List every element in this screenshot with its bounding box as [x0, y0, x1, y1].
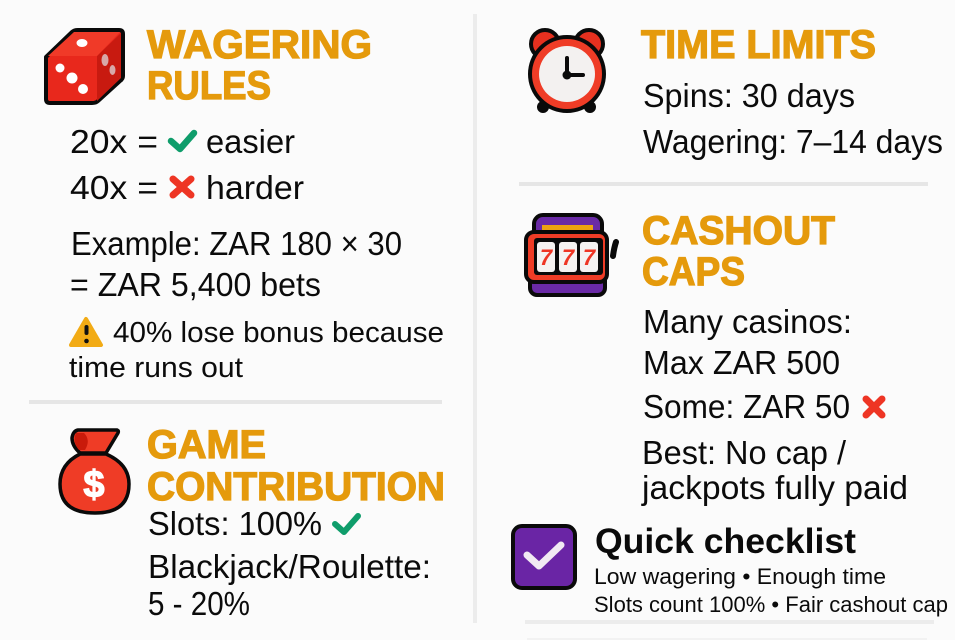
- icon: alarm clock: [530, 30, 604, 113]
- heading: wagering rules: [147, 23, 372, 108]
- icon: money bag: [60, 430, 129, 513]
- icon: slot machine: 7: [540, 245, 554, 270]
- heading: game contribution: CONTRIBUTION: [147, 465, 445, 509]
- text: many casinos: Many casinos:: [643, 303, 852, 340]
- text: blackjack roulette: [148, 548, 431, 622]
- text: time limit values: [643, 77, 943, 160]
- text: blackjack roulette: 5 - 20%: [148, 585, 250, 622]
- text: some casinos: Some: ZAR 50: [643, 388, 850, 425]
- icon: warning triangle: [71, 319, 101, 345]
- text: checklist items: Low wagering • Enough time: [594, 564, 886, 589]
- text: example: [70, 225, 402, 303]
- panel: wagering rules: [46, 23, 444, 384]
- text: best: jackpots fully paid: [641, 469, 908, 506]
- panel: quick checklist: [513, 522, 948, 617]
- heading: cashout caps: [642, 209, 835, 294]
- text: 20x easier: 20x =: [70, 123, 158, 160]
- text: slots: Slots: 100%: [148, 505, 322, 542]
- icon: slot machine: 7: [562, 245, 576, 270]
- text: checklist items: [594, 564, 948, 617]
- text: 20x easier: easier: [206, 123, 295, 160]
- heading: game contribution: [147, 423, 445, 509]
- heading: game contribution: GAME: [147, 423, 266, 467]
- text: example: Example: ZAR 180 × 30: [71, 225, 402, 262]
- callout: time warning: 40% lose bonus because: [113, 317, 444, 349]
- text: time limit values: Wagering: 7–14 days: [643, 123, 943, 160]
- text: time limit values: Spins: 30 days: [643, 77, 855, 114]
- text: best: [641, 434, 908, 506]
- heading: wagering rules: RULES: [147, 64, 271, 108]
- text: best: Best: No cap /: [642, 434, 847, 471]
- text: example: = ZAR 5,400 bets: [70, 266, 321, 303]
- icon: slot machine: 7: [583, 245, 597, 270]
- text: many casinos: [643, 303, 852, 381]
- heading: cashout caps: CAPS: [642, 250, 745, 294]
- heading: time limits: TIME LIMITS: [641, 23, 876, 67]
- panel: time limits: [530, 23, 943, 160]
- text: 40x harder: [70, 169, 304, 206]
- heading: cashout caps: CASHOUT: [642, 209, 835, 253]
- callout: time warning: [69, 317, 444, 384]
- panel: cashout caps: [526, 209, 908, 506]
- text: 20x easier: [70, 123, 295, 160]
- icon: red dice: [46, 30, 123, 103]
- callout: time warning: time runs out: [69, 352, 243, 384]
- text: 40x harder: harder: [206, 169, 304, 206]
- icon: slot machine: [526, 215, 616, 295]
- text: checklist items: Slots count 100% • Fair cashout cap: [594, 592, 948, 617]
- heading: quick checklist: Quick checklist: [595, 522, 856, 561]
- panel: game contribution: [60, 423, 445, 622]
- icon: money bag: $: [83, 464, 105, 506]
- text: many casinos: Max ZAR 500: [643, 344, 840, 381]
- text: 40x harder: 40x =: [70, 169, 158, 206]
- icon: purple checkbox: [513, 526, 575, 588]
- heading: wagering rules: WAGERING: [147, 23, 372, 67]
- text: blackjack roulette: Blackjack/Roulette:: [148, 548, 431, 585]
